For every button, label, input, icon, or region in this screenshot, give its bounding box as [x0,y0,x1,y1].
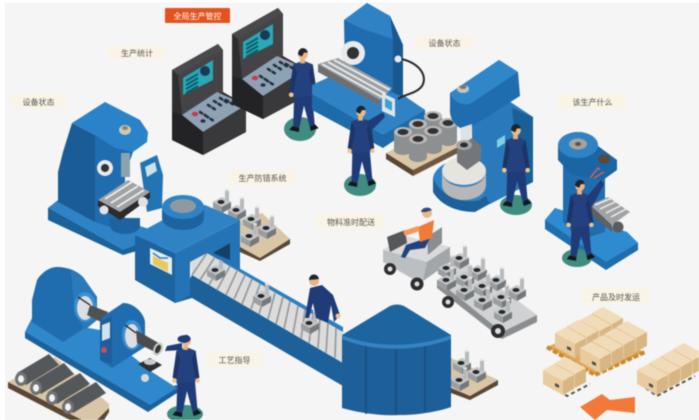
pipes on pallet [8,354,109,420]
operator at console [284,48,319,141]
label: material delivery [317,214,385,229]
label: process guidance [206,352,263,367]
arrow: dispatch [580,394,635,420]
label: overall control [165,8,230,23]
machine: top centre mill [312,3,425,148]
dome housing at conveyor end [342,304,451,415]
label: product shipping: 产品及时发运 [592,292,640,302]
conveyor worker [305,274,340,323]
label: equipment status left: 设备状态 [22,97,54,107]
control consoles [172,8,306,155]
label: equipment status top [416,36,473,50]
pallet of parts beside housing [451,350,498,400]
lathe operator [165,335,203,420]
operator with tablet [344,106,385,196]
label: what to produce [558,94,627,109]
parts trailer [437,245,537,339]
operator at small press [562,168,604,267]
machine: right centre press [433,60,533,212]
label: product shipping [582,289,650,304]
label: equipment status left [10,94,67,109]
machine: right press small [545,132,638,270]
label: equipment status top: 设备状态 [428,38,460,48]
operator at press [500,124,532,215]
label: error proofing: 生产防错系统 [238,173,286,183]
cartons on pallets [543,307,699,396]
label: production statistics: 生产统计 [121,48,153,58]
label: material delivery: 物料准时配送 [327,217,375,227]
label: production statistics [108,46,165,60]
tractor with driver [383,208,450,290]
label: overall control: 全局生产管控 [174,11,222,21]
conveyor gate block [135,195,240,303]
machine: left mill [48,102,165,255]
conveyor belt [175,250,343,386]
cylinders on pallet [386,111,460,176]
label: error proofing [229,170,296,185]
pallet of parts behind conveyor [213,189,290,261]
lathe [25,267,177,412]
label: process guidance: 工艺指导 [218,355,250,365]
label: what to produce: 该生产什么 [572,97,612,107]
